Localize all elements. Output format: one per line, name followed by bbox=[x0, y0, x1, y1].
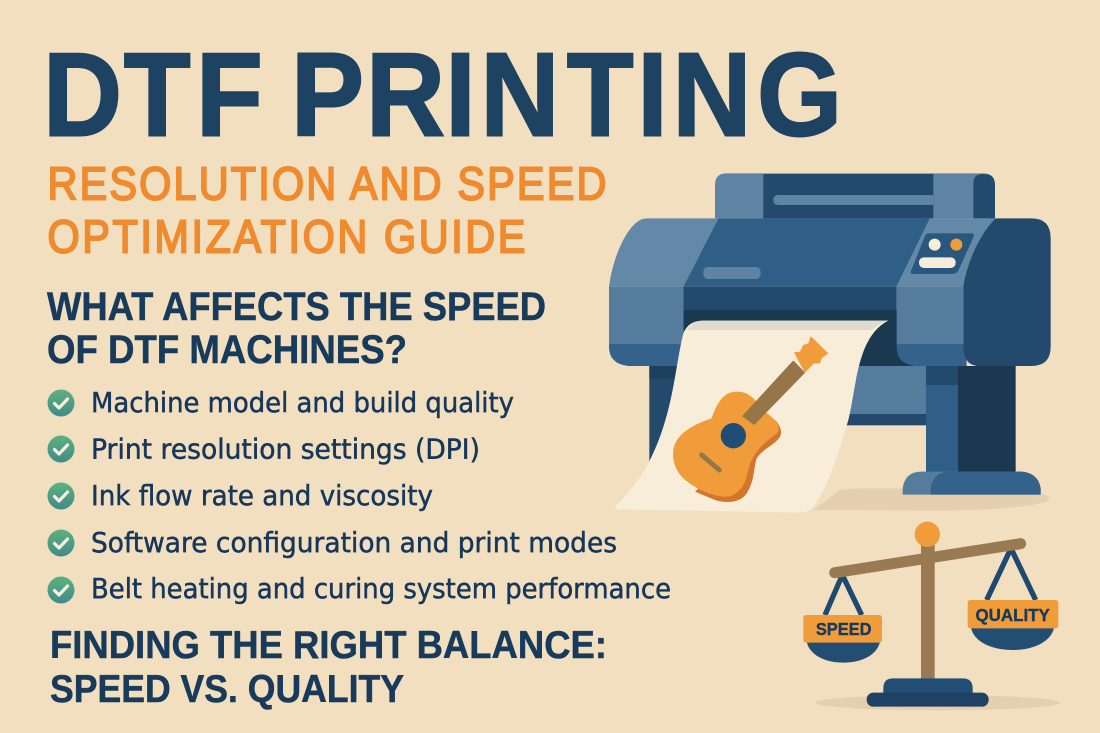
scale base bbox=[867, 678, 989, 707]
printer body bbox=[609, 218, 1051, 366]
right pan: quality: QUALITY bbox=[975, 605, 1050, 625]
subtitle: RESOLUTION AND SPEED bbox=[48, 159, 606, 210]
printed film sheet bbox=[615, 321, 888, 513]
heading: finding the balance bbox=[50, 624, 607, 711]
heading: finding the balance: SPEED VS. QUALITY bbox=[50, 668, 404, 711]
illustration: balance scale bbox=[803, 522, 1060, 710]
subtitle bbox=[48, 159, 606, 263]
heading: what affects speed bbox=[47, 285, 546, 372]
right pan: quality bbox=[968, 548, 1058, 650]
title: DTF PRINTING bbox=[43, 30, 842, 162]
scale post bbox=[921, 545, 935, 680]
guitar artwork bbox=[673, 336, 828, 502]
left pan: speed bbox=[803, 575, 882, 663]
printer legs bbox=[649, 366, 1016, 473]
scale pivot bbox=[915, 522, 940, 547]
list item 2: Print resolution settings (DPI) bbox=[91, 434, 480, 466]
printer control panel bbox=[911, 233, 974, 274]
heading: what affects speed: WHAT AFFECTS THE SPEED bbox=[47, 285, 546, 329]
heading: what affects speed: OF DTF MACHINES? bbox=[47, 328, 407, 372]
list item 5: Belt heating and curing system performance bbox=[91, 573, 671, 605]
heading: finding the balance: FINDING THE RIGHT BALANCE: bbox=[50, 624, 607, 667]
checklist bbox=[48, 387, 671, 605]
illustration: printer bbox=[609, 173, 1051, 513]
subtitle: OPTIMIZATION GUIDE bbox=[48, 212, 525, 263]
left pan: speed: SPEED bbox=[816, 619, 872, 639]
list item 3: Ink flow rate and viscosity bbox=[91, 480, 433, 512]
printer foot bbox=[903, 472, 1041, 495]
list item 1: Machine model and build quality bbox=[91, 387, 514, 419]
scale beam bbox=[835, 544, 1021, 573]
printer top unit bbox=[715, 173, 995, 218]
list item 4: Software configuration and print modes bbox=[91, 527, 617, 559]
